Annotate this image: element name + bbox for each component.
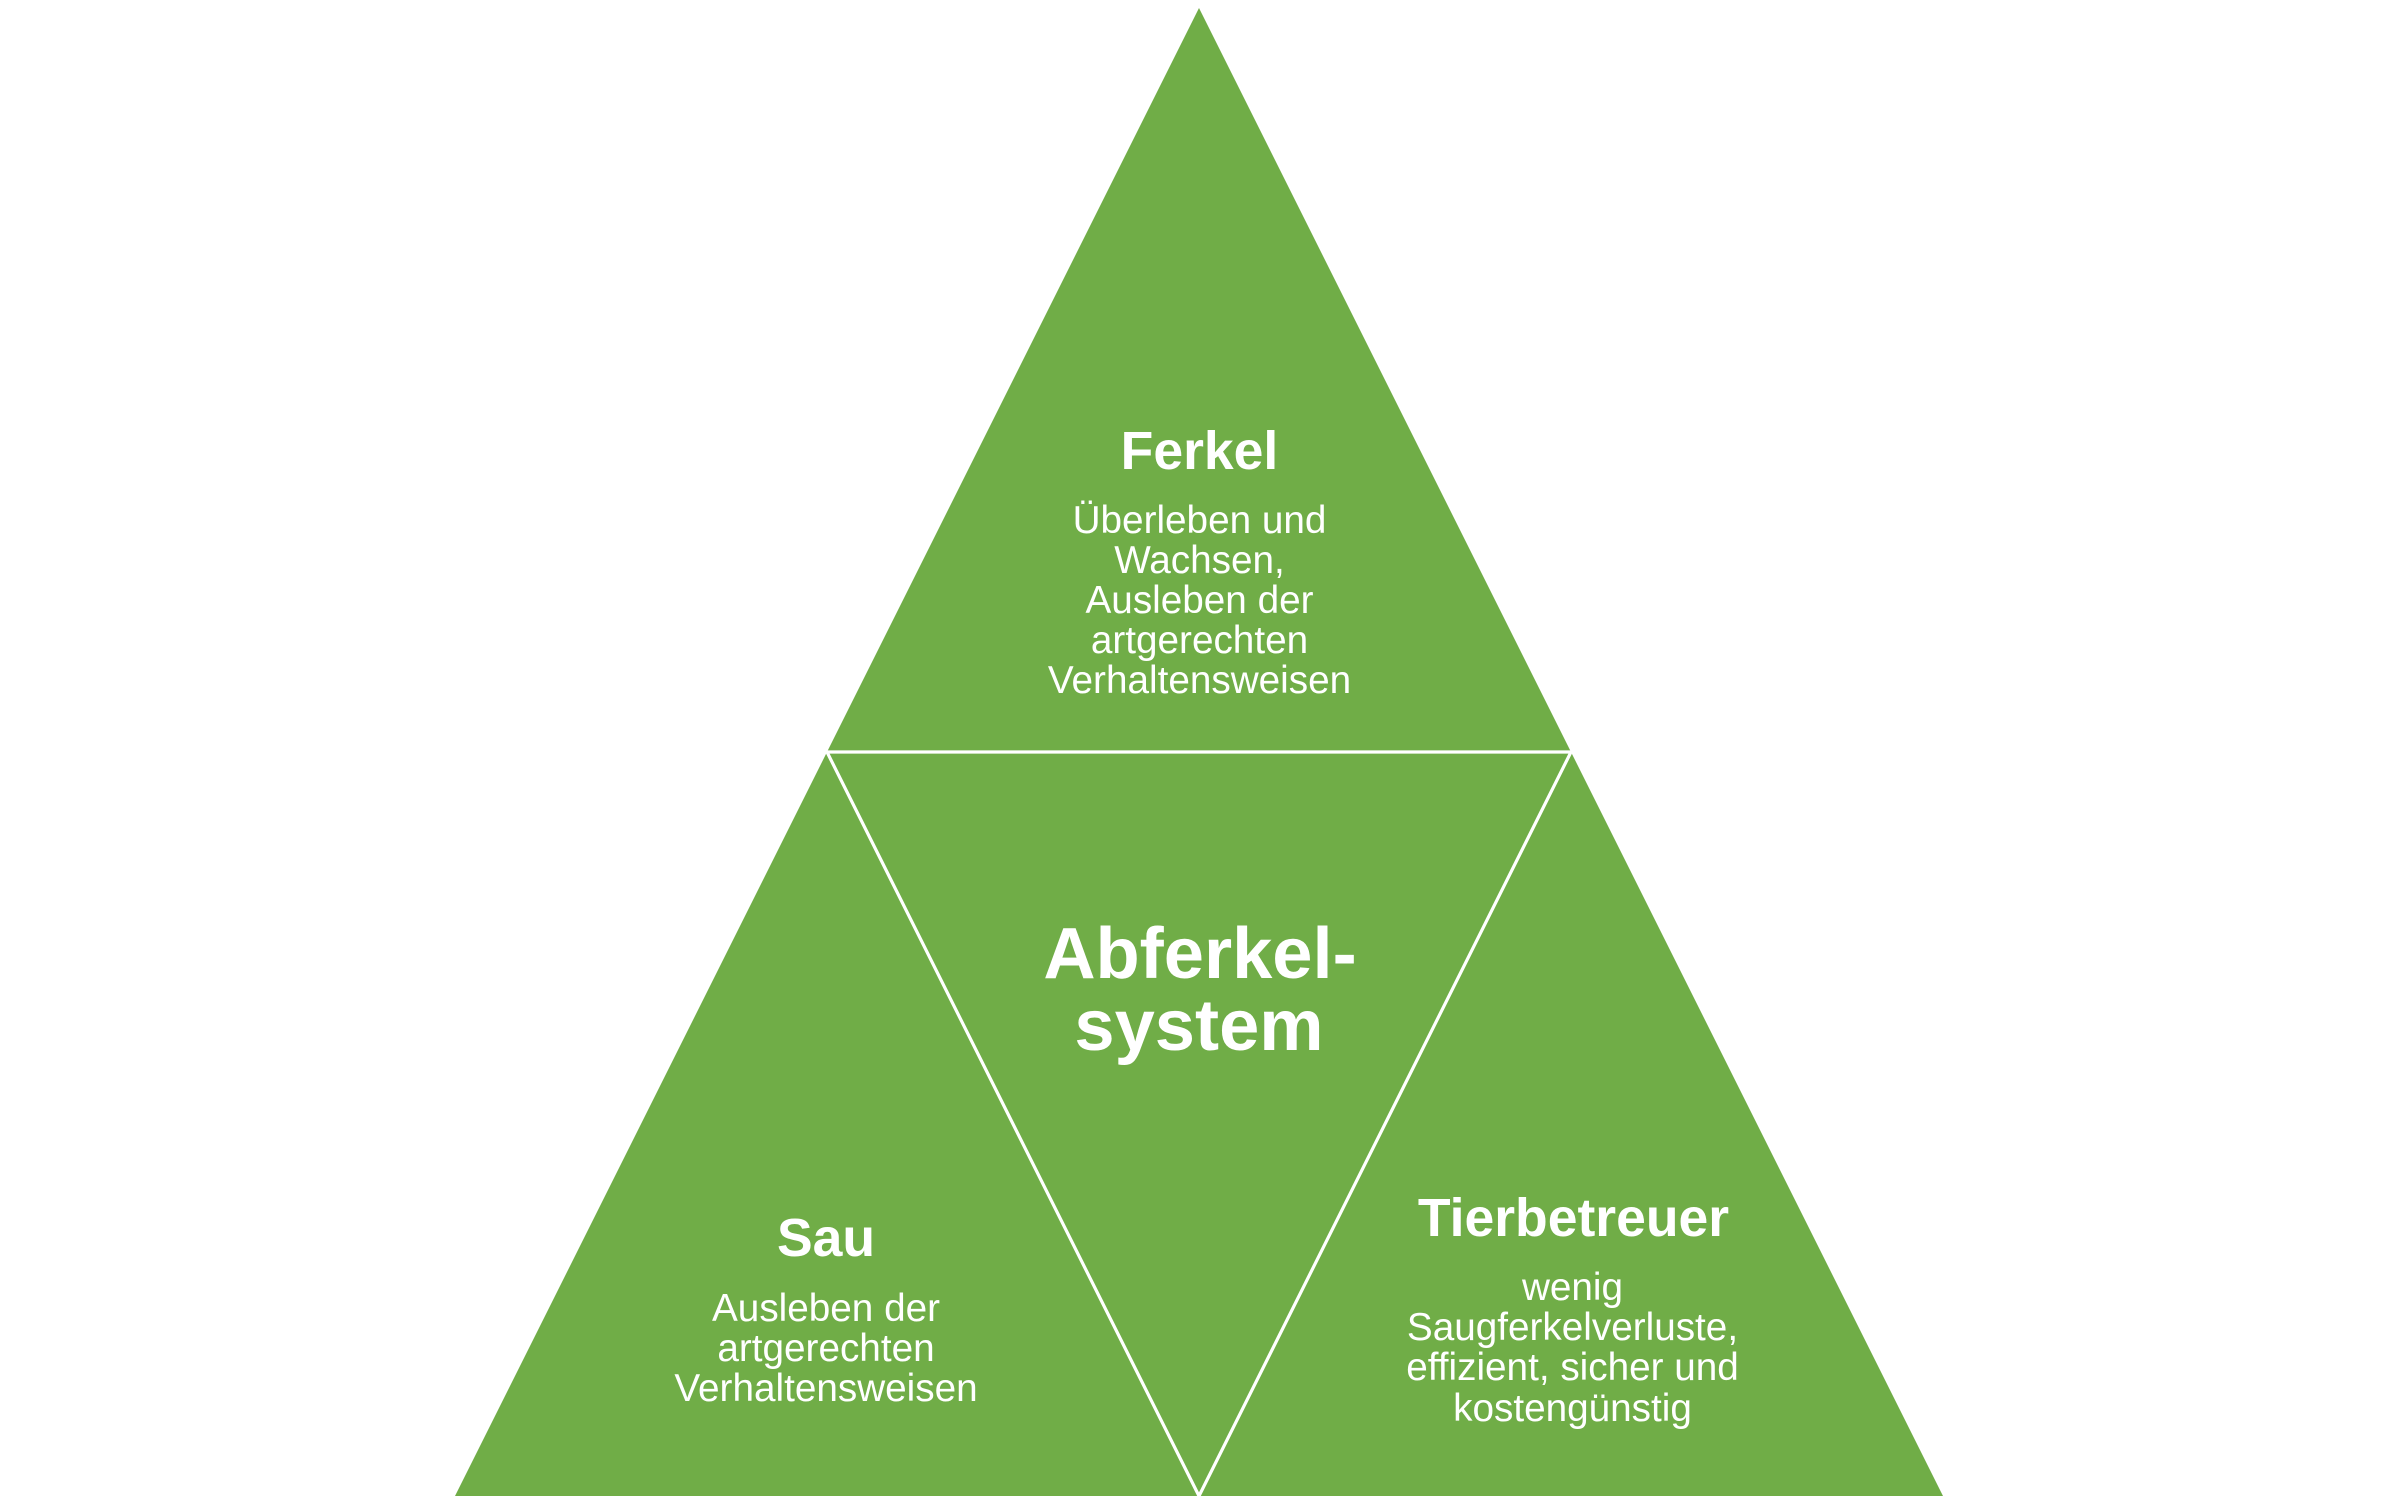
text block: Ferkel description: Ausleben der <box>1086 579 1314 622</box>
panel: left triangle Sau <box>455 752 1199 1496</box>
text block: Tierbetreuer description: effizient, sicher und <box>1406 1346 1739 1389</box>
heading: Tierbetreuer: Tierbetreuer <box>1418 1189 1729 1248</box>
text block: Ferkel description: Überleben und <box>1073 499 1326 542</box>
text block: Sau description: artgerechten <box>717 1327 935 1370</box>
heading: Ferkel: Ferkel <box>1121 422 1278 481</box>
text block: Sau description: Ausleben der <box>712 1287 940 1330</box>
heading: Sau: Sau <box>777 1209 875 1268</box>
heading: centre title Abferkelsystem: Abferkel- <box>1043 914 1357 994</box>
text block: Tierbetreuer description: kostengünstig <box>1453 1387 1692 1430</box>
text block: Tierbetreuer description: wenig <box>1521 1266 1623 1309</box>
text block: Tierbetreuer description <box>1406 1266 1739 1430</box>
text block: Ferkel description: Verhaltensweisen <box>1048 659 1351 702</box>
heading: centre title Abferkelsystem: system <box>1074 986 1324 1066</box>
text block: Tierbetreuer description: Saugferkelverluste, <box>1407 1306 1738 1349</box>
text block: Sau description <box>674 1287 978 1410</box>
text block: Ferkel description: artgerechten <box>1091 619 1308 662</box>
text block: Ferkel description <box>1048 499 1351 702</box>
heading: centre title Abferkelsystem <box>1043 914 1357 1066</box>
text block: Sau description: Verhaltensweisen <box>674 1367 978 1410</box>
text block: Ferkel description: Wachsen, <box>1114 539 1285 582</box>
panel: right triangle Tierbetreuer <box>1199 752 1943 1496</box>
panel: centre inverted triangle <box>827 752 1571 1496</box>
pyramid diagram <box>455 8 1943 1496</box>
panel: top triangle Ferkel <box>827 8 1571 752</box>
